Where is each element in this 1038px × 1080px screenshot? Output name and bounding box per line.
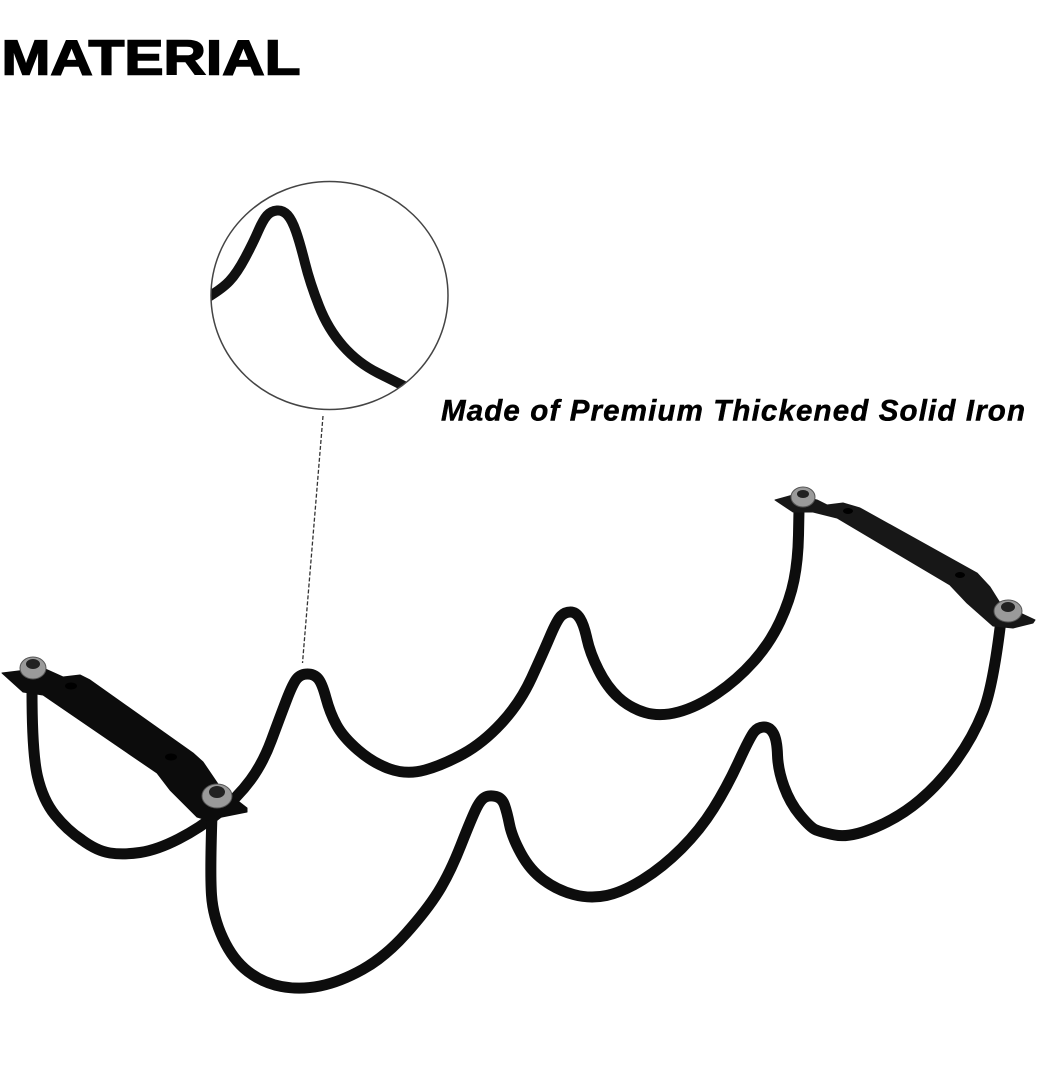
left bracket: [2, 668, 247, 820]
dashed leader line: [302, 416, 323, 663]
bolts: [20, 487, 1022, 808]
back wire: [32, 510, 799, 854]
title: MATERIAL: [2, 32, 300, 86]
bracket holes: [65, 508, 965, 760]
caption: material description: Made of Premium Thickened Solid Iron: [441, 394, 1025, 428]
wine rack illustration: [2, 487, 1035, 988]
right bracket: [775, 495, 1035, 628]
zoom callout circle: [205, 182, 448, 410]
bolt centers: [26, 490, 1015, 798]
front wire: [211, 620, 1001, 988]
